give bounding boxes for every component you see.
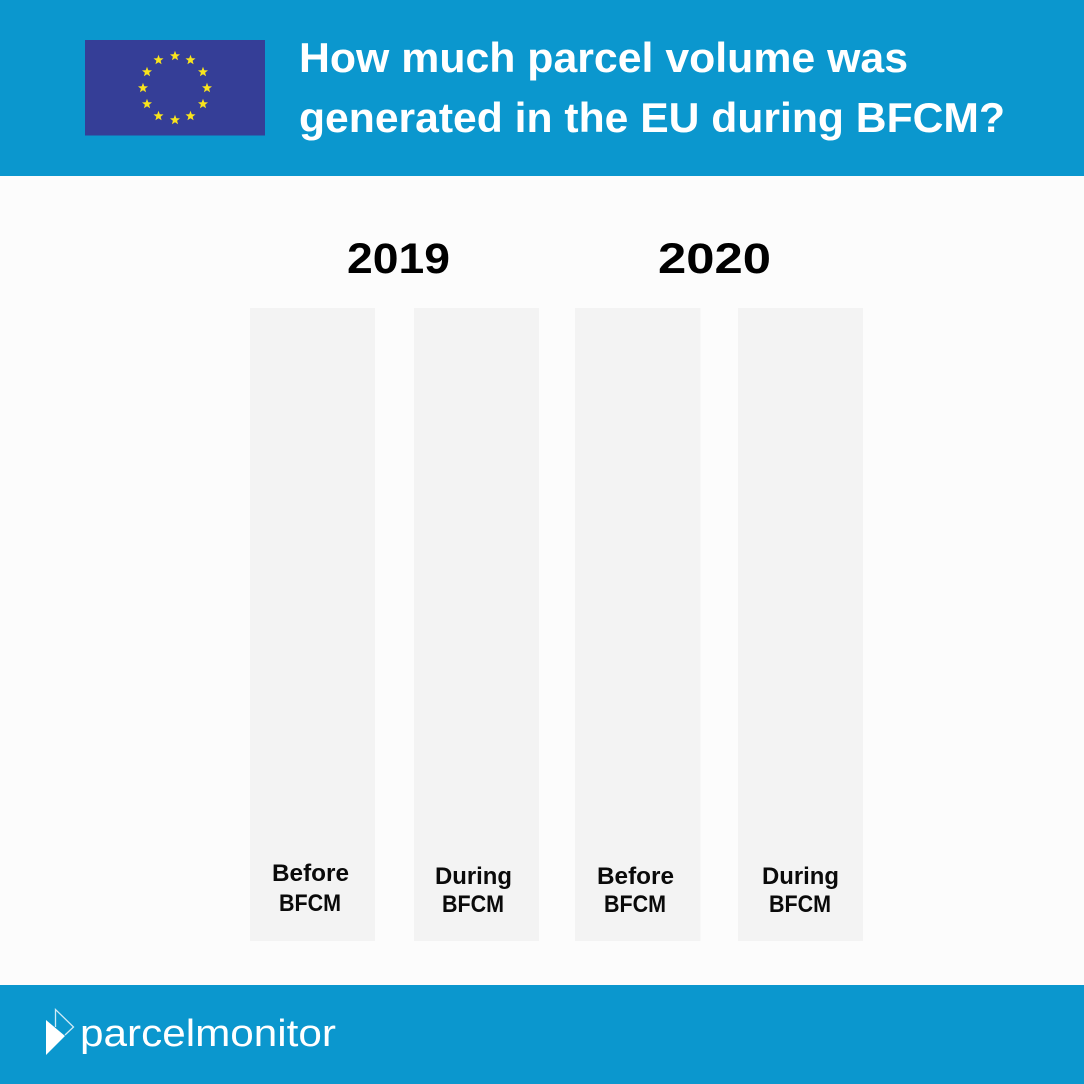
bar: 2020 during BFCM bbox=[738, 308, 863, 941]
bar: 2020 before BFCM bbox=[575, 308, 700, 941]
header band bbox=[0, 0, 1084, 176]
bar: 2019 during BFCM: BFCM bbox=[442, 891, 504, 918]
year heading: 2019: 2019 bbox=[347, 235, 450, 283]
bar: 2019 before BFCM: Before bbox=[272, 860, 349, 887]
bar: 2020 during BFCM: BFCM bbox=[769, 891, 831, 918]
icon: parcelmonitor logo mark bbox=[46, 1010, 74, 1055]
bar: 2020 before BFCM: BFCM bbox=[604, 891, 666, 918]
bar: 2019 before BFCM bbox=[250, 308, 375, 941]
title: How much parcel volume was bbox=[299, 34, 908, 81]
bar: 2019 during BFCM bbox=[414, 308, 539, 941]
bar: 2019 before BFCM: BFCM bbox=[279, 890, 341, 917]
bar: 2019 during BFCM: During bbox=[435, 863, 512, 890]
year heading: 2020: 2020 bbox=[658, 235, 771, 283]
bar: 2020 during BFCM: During bbox=[762, 863, 839, 890]
footer band bbox=[0, 985, 1084, 1084]
bar: 2020 before BFCM: Before bbox=[597, 863, 674, 890]
logo wordmark: parcelmonitor bbox=[80, 1013, 336, 1055]
title: generated in the EU during BFCM? bbox=[299, 94, 1005, 141]
icon: EU flag bbox=[85, 40, 265, 136]
title bbox=[299, 34, 1005, 141]
